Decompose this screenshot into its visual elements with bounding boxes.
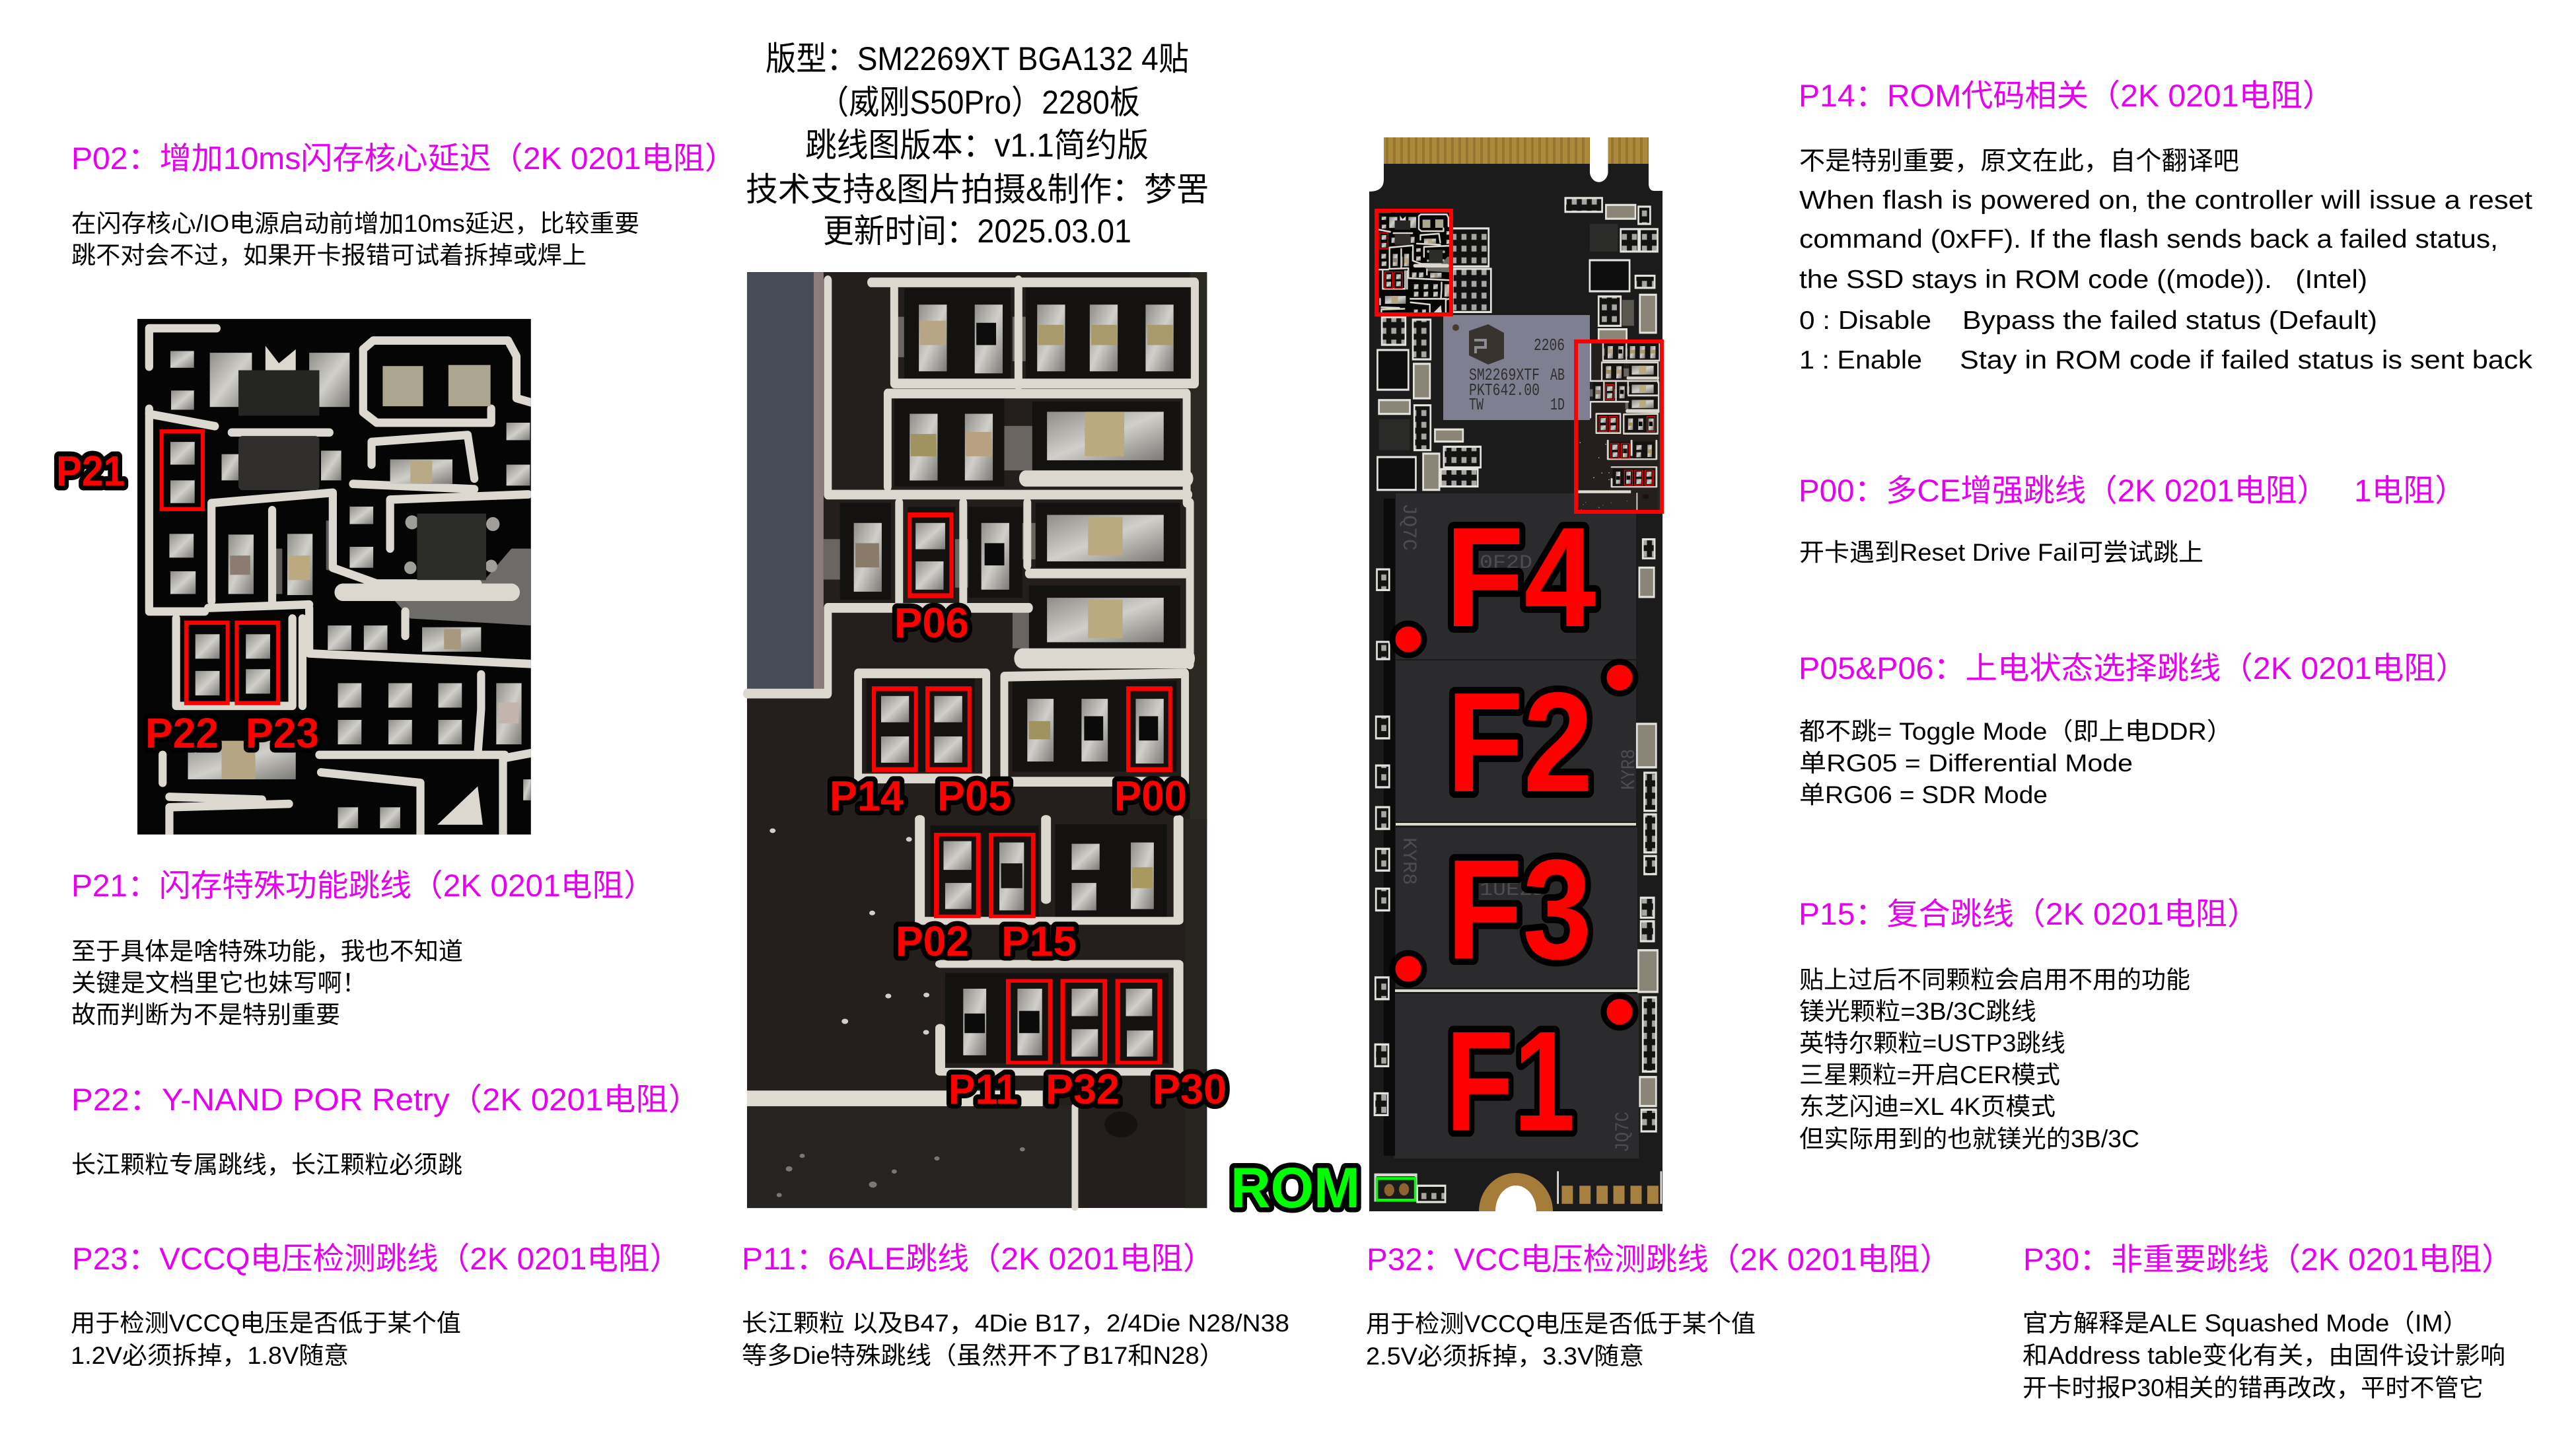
label: P14: P14 [830, 772, 904, 820]
flash chips [1394, 493, 1639, 1158]
panel: P30 description: P30：非重要跳线（2K 0201电阻） [2023, 1242, 2513, 1277]
panel: P05 and P06 description: 单RG05 = Differential Mode [1799, 750, 2133, 777]
panel: P32 description: 2.5V必须拆掉，3.3V随意 [1366, 1343, 1644, 1370]
marker: P30 box [1118, 981, 1160, 1063]
label: P32: P32 [1046, 1065, 1120, 1113]
panel: P14 description: command (0xFF). If the flash sends back a failed status, [1799, 225, 2498, 254]
title block: 更新时间：2025.03.01 [823, 213, 1131, 250]
panel: P14 description: Bypass the failed status (Default) [1962, 306, 2377, 335]
title block: （威刚S50Pro）2280板 [818, 84, 1140, 121]
panel: P22 description: 长江颗粒专属跳线，长江颗粒必须跳 [71, 1151, 462, 1178]
flash dot: F4 [1392, 623, 1424, 655]
panel: P05 and P06 description: 都不跳= Toggle Mode（即上电DDR） [1799, 718, 2233, 745]
marker: P15 box [991, 835, 1033, 916]
chip markings: 1UE2D [1480, 879, 1546, 902]
marker: ROM box [1377, 1178, 1415, 1200]
panel: P22 description: P22：Y-NAND POR Retry（2K 0201电阻） [71, 1082, 701, 1117]
label: P21: P21 [56, 447, 125, 495]
panel: P14 description: 不是特别重要，原文在此，自个翻译吧 [1799, 147, 2239, 176]
photo: left PCB close-up with P21 P22 P23 [137, 319, 531, 835]
panel: P05 and P06 description [1799, 651, 2468, 808]
marker: P21 box [162, 431, 203, 509]
label: P30: P30 [1153, 1065, 1227, 1113]
controller chip: AB [1550, 365, 1565, 385]
components lower half [1375, 717, 1661, 1204]
miniature of centre close-up [1575, 340, 1662, 512]
chip markings: KYR8 [1618, 749, 1641, 790]
panel: P21 description: 至于具体是啥特殊功能，我也不知道 [71, 938, 463, 965]
panel: P32 description [1366, 1242, 1951, 1370]
panel: P22 description [71, 1082, 701, 1178]
panel: P30 description: 开卡时报P30相关的错再改改，平时不管它 [2022, 1374, 2484, 1401]
panel: P02 description: 跳不对会不过，如果开卡报错可试着拆掉或焊上 [71, 242, 587, 269]
panel: P23 description: P23：VCCQ电压检测跳线（2K 0201电阻） [72, 1241, 681, 1276]
label: F4: F4 [1445, 497, 1596, 656]
panel: P30 description [2022, 1242, 2513, 1401]
panel: P11 description: 等多Die特殊跳线（虽然开不了B17和N28） [742, 1342, 1225, 1369]
components upper half [1377, 198, 1658, 659]
photo: centre PCB close-up [747, 272, 1207, 1208]
marker: P05 box [927, 689, 970, 769]
controller chip: SM2269XTF [1469, 365, 1540, 385]
marker: P02 box [937, 835, 978, 916]
flash dot: F3 [1392, 953, 1424, 985]
panel: P14 description: When flash is powered on, the controller will issue a reset [1799, 186, 2532, 215]
title block: 版型：SM2269XT BGA132 4贴 [766, 40, 1189, 77]
marker: P06 box [910, 515, 951, 596]
controller chip: TW [1469, 395, 1484, 415]
title block: 技术支持&图片拍摄&制作：梦罟 [746, 171, 1209, 208]
chip markings: JQ7C [1612, 1112, 1635, 1152]
panel: P15 description: 但实际用到的也就镁光的3B/3C [1799, 1125, 2139, 1152]
panel: P00 description: 开卡遇到Reset Drive Fail可尝试跳上 [1799, 539, 2203, 566]
panel: P02 description [71, 141, 736, 269]
panel: SSD board photo [1369, 137, 1663, 1211]
panel: P00 description [1799, 473, 2466, 566]
panel: P15 description: P15：复合跳线（2K 0201电阻） [1799, 896, 2259, 931]
marker: right cluster zone [1576, 341, 1662, 512]
panel: P11 description: 长江颗粒 以及B47，4Die B17，2/4Die N28/N38 [742, 1310, 1289, 1337]
label: P22: P22 [145, 709, 219, 757]
panel: P00 description: P00：多CE增强跳线（2K 0201电阻） [1799, 473, 2328, 508]
mounting notch [1479, 1173, 1553, 1211]
panel: P14 description: 0 : Disable [1799, 306, 1931, 335]
panel: P14 description: 1 : Enable [1799, 346, 1922, 374]
panel: P23 description: 1.2V必须拆掉，1.8V随意 [71, 1342, 349, 1369]
controller chip: 1D [1550, 395, 1565, 415]
label: P00: P00 [1114, 772, 1187, 820]
miniature of left close-up [1375, 210, 1451, 315]
label: ROM: ROM [1231, 1156, 1360, 1220]
label: F1: F1 [1446, 1001, 1575, 1160]
marker: P14 box [874, 689, 916, 769]
panel: P15 description: 东芝闪迪=XL 4K页模式 [1799, 1093, 2056, 1120]
flash dot: F1 [1604, 996, 1635, 1028]
panel: P00 description: 1电阻） [2354, 473, 2466, 508]
panel: P14 description [1799, 78, 2533, 374]
label: F3: F3 [1447, 830, 1592, 989]
panel: P05 and P06 description: P05&P06：上电状态选择跳线（2K 0201电阻） [1799, 651, 2468, 686]
flash dot: F2 [1604, 662, 1635, 693]
panel: P21 description: P21：闪存特殊功能跳线（2K 0201电阻） [71, 868, 655, 903]
panel: P30 description: 官方解释是ALE Squashed Mode（IM） [2022, 1310, 2468, 1337]
panel: P14 description: P14：ROM代码相关（2K 0201电阻） [1799, 78, 2334, 113]
panel: P15 description [1799, 896, 2259, 1152]
label: P05: P05 [937, 772, 1011, 820]
marker: P32 box left [1008, 981, 1050, 1063]
controller chip: 2206 [1534, 336, 1565, 355]
title block: 跳线图版本：v1.1简约版 [805, 127, 1149, 164]
panel: P14 description: the SSD stays in ROM code ((mode)). (Intel) [1799, 266, 2367, 294]
panel: P02 description: P02：增加10ms闪存核心延迟（2K 0201电阻） [71, 141, 736, 176]
label: F2: F2 [1447, 662, 1593, 822]
panel: P15 description: 贴上过后不同颗粒会启用不用的功能 [1799, 966, 2190, 993]
panel: P21 description: 关键是文档里它也妹写啊！ [71, 970, 367, 997]
label: P02: P02 [896, 917, 969, 965]
panel: P21 description: 故而判断为不是特别重要 [71, 1001, 340, 1028]
panel: P11 description: P11：6ALE跳线（2K 0201电阻） [742, 1241, 1215, 1276]
marker: P23 box [236, 623, 278, 703]
panel: P02 description: 在闪存核心/IO电源启动前增加10ms延迟，比较重要 [71, 210, 639, 237]
panel: P15 description: 三星颗粒=开启CER模式 [1799, 1061, 2060, 1088]
marker: P22 box [186, 623, 228, 703]
panel: P11 description [742, 1241, 1289, 1369]
panel: P15 description: 镁光颗粒=3B/3C跳线 [1799, 998, 2036, 1025]
chip markings [1397, 503, 1641, 1152]
panel: P32 description: 用于检测VCCQ电压是否低于某个值 [1366, 1310, 1756, 1337]
label: P06: P06 [894, 599, 969, 647]
panel: P23 description [71, 1241, 681, 1369]
label: P11: P11 [948, 1065, 1018, 1113]
controller chip [1443, 315, 1590, 420]
panel: P21 description [71, 868, 655, 1028]
controller chip: PKT642.00 [1469, 380, 1540, 400]
chip markings: 0F2D [1480, 552, 1532, 575]
board body [1369, 137, 1663, 1211]
marker: P00 box [1128, 689, 1170, 769]
chip markings: KYR8 [1397, 837, 1419, 885]
panel: P14 description: Stay in ROM code if failed status is sent back [1960, 346, 2533, 374]
panel: P15 description: 英特尔颗粒=USTP3跳线 [1799, 1030, 2065, 1057]
panel: P23 description: 用于检测VCCQ电压是否低于某个值 [71, 1310, 461, 1337]
chip markings: JQ7C [1397, 503, 1419, 551]
title block [746, 40, 1209, 250]
label: P15: P15 [1001, 917, 1077, 965]
marker: P32 box right [1063, 981, 1105, 1063]
gold fingers [1384, 137, 1649, 164]
label: P23: P23 [246, 709, 319, 757]
panel: P05 and P06 description: 单RG06 = SDR Mode [1799, 781, 2048, 808]
marker: left cluster zone [1377, 211, 1451, 314]
panel: P32 description: P32：VCC电压检测跳线（2K 0201电阻） [1367, 1242, 1951, 1277]
panel: P30 description: 和Address table变化有关，由固件设计影响 [2022, 1342, 2505, 1369]
